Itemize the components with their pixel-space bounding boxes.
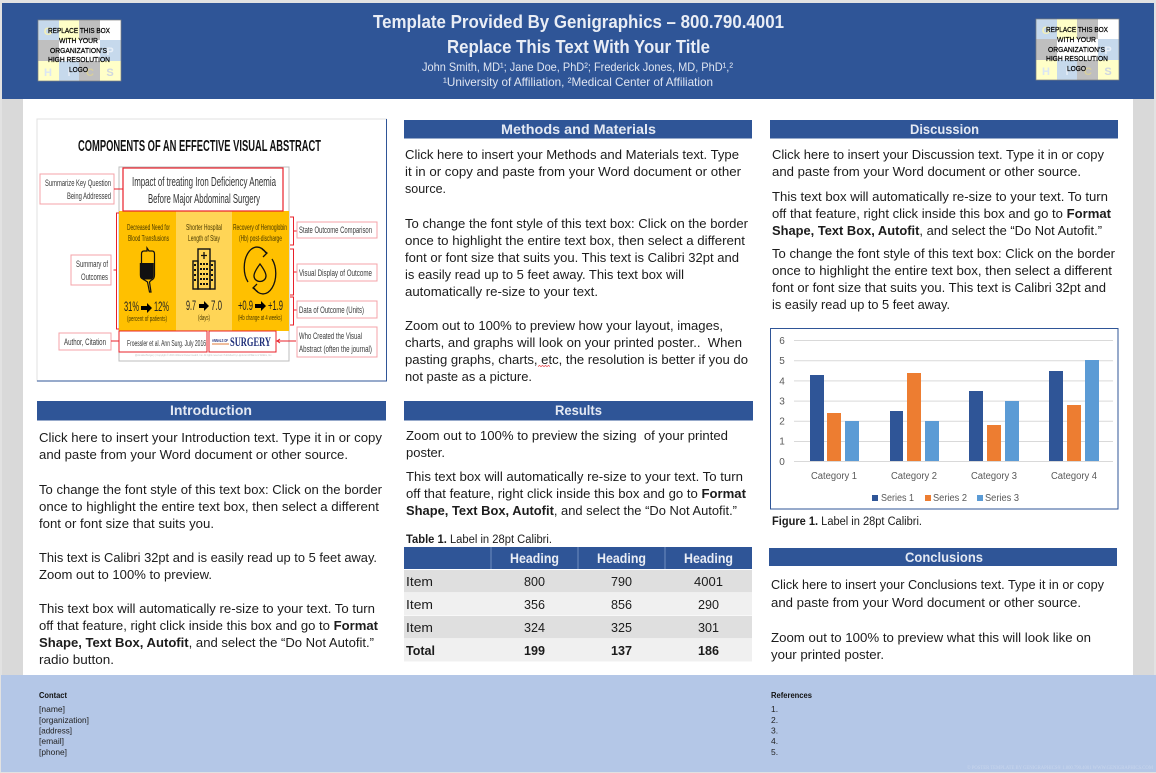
- figure title: COMPONENTS OF AN EFFECTIVE VISUAL ABSTRACT: [78, 138, 321, 155]
- text: methods body: it in or copy and paste from your Word document or other: [405, 164, 742, 179]
- logo placeholder left: H: [44, 67, 52, 79]
- text: conclusions body: Click here to insert your Conclusions text. Type it in or copy: [771, 577, 1104, 592]
- text: introduction body: To change the font style of this text box: Click on the border: [39, 482, 383, 497]
- text: methods body: [405, 147, 749, 384]
- annotation: summary of outcomes: Outcomes: [81, 272, 108, 282]
- text: conclusions body: Zoom out to 100% to preview what this will look like on: [771, 630, 1091, 645]
- text: introduction body: This text is Calibri 32pt and is easily read up to 5 feet away.: [39, 550, 377, 565]
- footer band: [1, 675, 1156, 772]
- text: introduction body: Click here to insert your Introduction text. Type it in or copy: [39, 430, 382, 445]
- annotation: summary of outcomes: [71, 213, 119, 329]
- data table: 199: [524, 643, 545, 658]
- references block: 2.: [771, 715, 778, 725]
- text: introduction body: off that feature, right click inside this box and go to Format: [39, 618, 379, 633]
- authors: John Smith, MD¹; Jane Doe, PhD²; Frederick Jones, MD, PhD¹,²: [422, 60, 733, 74]
- annotation: summarize key question: [40, 174, 123, 204]
- data table: Total: [406, 643, 435, 658]
- panel: methods and materials: [404, 120, 752, 384]
- references block: [771, 691, 813, 757]
- annotation: author citation: [59, 333, 119, 350]
- bar chart: 6: [779, 336, 785, 347]
- heading: conclusions: [769, 548, 1117, 566]
- outcome headings: Length of Stay: [188, 234, 220, 243]
- annotation: summarize key question: Summarize Key Question: [45, 178, 111, 188]
- logo placeholder left: REPLACE THIS BOX: [48, 26, 110, 35]
- logo placeholder right: S: [1104, 66, 1112, 78]
- data table: 324: [524, 620, 545, 635]
- logo placeholder right: LOGO: [1067, 64, 1086, 73]
- outcome data values: +0.9: [238, 298, 253, 313]
- data table: Item: [406, 620, 433, 635]
- poster title: Replace This Text With Your Title: [447, 37, 710, 57]
- text: methods body: not paste as a picture.: [405, 369, 532, 384]
- annotation: summarize key question: Being Addressed: [67, 191, 111, 201]
- text: introduction body: radio button.: [39, 652, 114, 667]
- logo placeholder right: HIGH RESOLUTION: [1046, 54, 1108, 63]
- chart legend: [872, 493, 1019, 504]
- logo placeholder right: C: [1084, 66, 1092, 78]
- journal logo box: [209, 331, 276, 352]
- outcome headings: [127, 223, 287, 243]
- references block: 4.: [771, 736, 778, 746]
- annotation: summary of outcomes: Summary of: [76, 259, 108, 269]
- outcome data values: 31%: [124, 299, 139, 314]
- logo placeholder left: LOGO: [69, 65, 88, 74]
- bar chart: 2: [779, 416, 785, 428]
- logo placeholder right: ORGANIZATION’S: [1048, 45, 1105, 54]
- annotation: visual display of outcome: [290, 249, 377, 295]
- heading: results: Results: [555, 403, 602, 418]
- data table: 290: [698, 597, 719, 612]
- heading: methods and materials: Methods and Materials: [501, 122, 656, 137]
- text: discussion body: once to highlight the entire text box, then select a different: [772, 263, 1112, 278]
- category labels: Category 2: [891, 471, 937, 482]
- data table: 325: [611, 620, 632, 635]
- logo placeholder left: I: [67, 67, 71, 79]
- text: methods body: Zoom out to 100% to preview how your layout, images,: [405, 318, 723, 333]
- logo placeholder right: P: [1104, 45, 1112, 57]
- annotation: data of outcome: Data of Outcome (Units): [299, 305, 364, 315]
- heading: discussion: Discussion: [910, 122, 979, 137]
- bar chart: 0: [779, 457, 785, 468]
- data table: 137: [611, 643, 632, 658]
- text: results body: [406, 428, 747, 518]
- key question box: Before Major Abdominal Surgery: [148, 192, 260, 206]
- logo placeholder right: REPLACE THIS BOX: [1046, 25, 1108, 34]
- text: conclusions body: your printed poster.: [771, 647, 884, 662]
- text: discussion body: [772, 147, 1116, 312]
- contact block: [email]: [39, 736, 64, 746]
- outcome data values: 12%: [154, 299, 169, 314]
- data table: 4001: [694, 574, 723, 589]
- text: introduction body: and paste from your Word document or other source.: [39, 447, 348, 462]
- text: discussion body: and paste from your Word document or other source.: [772, 164, 1081, 179]
- text: introduction body: Zoom out to 100% to preview.: [39, 567, 212, 582]
- icon: recovery cycle with droplet: [244, 247, 276, 294]
- outcome headings: (Hb) post-discharge: [239, 234, 282, 243]
- text: discussion body: font or font size that suits you. This text is Calibri 32pt and: [772, 280, 1106, 295]
- header banner: [2, 3, 1154, 99]
- text: discussion body: is easily read up to 5 feet away.: [772, 297, 950, 312]
- heading: conclusions: Conclusions: [905, 550, 983, 565]
- table caption: Table 1. Label in 28pt Calibri.: [406, 534, 552, 546]
- annotation: who created the abstract: Abstract (often the journal): [299, 344, 372, 354]
- panel: visual abstract figure: @AnnalsofSurgery | Copyright © 2016 Wolters Kluwer Health, Inc. All rights reserved. Published by Lippincott Williams & Wilkins, Inc.: [135, 353, 272, 357]
- text: introduction body: once to highlight the entire text box, then select a different: [39, 499, 379, 514]
- data table: [404, 547, 752, 662]
- category labels: Category 3: [971, 471, 1017, 482]
- heading: methods and materials: [404, 120, 752, 138]
- text: methods body: source.: [405, 181, 446, 196]
- chart legend: Series 1: [881, 493, 914, 504]
- bar chart: 4: [779, 376, 785, 388]
- contact block: [39, 691, 89, 757]
- annotation: state outcome comparison: State Outcome Comparison: [299, 225, 372, 235]
- outcome data values: (days): [198, 315, 210, 322]
- text: results body: Zoom out to 100% to preview the sizing of your printed: [406, 428, 728, 443]
- chart legend: Series 2: [933, 493, 967, 504]
- heading: introduction: [37, 401, 386, 420]
- annotation: data of outcome: [290, 297, 377, 325]
- data table: Item: [406, 597, 433, 612]
- journal logo box: SURGERY: [230, 334, 271, 349]
- citation box: [119, 331, 207, 352]
- outcome headings: Blood Transfusions: [128, 234, 169, 243]
- logo placeholder left: P: [106, 46, 114, 58]
- logo placeholder right: G: [1042, 25, 1050, 37]
- outcome headings: Shorter Hospital: [186, 223, 222, 232]
- outcome headings: Decreased Need for: [127, 223, 170, 232]
- references block: 1.: [771, 704, 778, 714]
- category labels: Category 4: [1051, 471, 1097, 482]
- panel: results: [404, 401, 753, 662]
- data table: Heading: [684, 551, 733, 566]
- text: methods body: To change the font style of this text box: Click on the border: [405, 216, 749, 231]
- panel: conclusions: [769, 548, 1117, 662]
- logo placeholder right: H: [1042, 66, 1050, 78]
- text: discussion body: off that feature, right click inside this box and go to Format: [772, 206, 1112, 221]
- logo placeholder left: WITH YOUR: [59, 36, 98, 45]
- logo placeholder left: ORGANIZATION’S: [50, 46, 107, 55]
- text: results body: Shape, Text Box, Autofit, and select the “Do Not Autofit.”: [406, 503, 737, 518]
- data table: 186: [698, 643, 719, 658]
- text: methods body: pasting graphs, charts, etc, the resolution is better if you do: [405, 352, 748, 367]
- references block: References: [771, 691, 813, 700]
- outcome data values: (percent of patients): [127, 316, 167, 323]
- poster title: Template Provided By Genigraphics – 800.790.4001: [373, 12, 784, 32]
- text: methods body: once to highlight the entire text box, then select a different: [405, 233, 745, 248]
- outcome data values: (Hb change at 4 weeks): [238, 315, 282, 322]
- text: discussion body: To change the font style of this text box: Click on the border: [772, 246, 1116, 261]
- heading: results: [404, 401, 753, 420]
- text: introduction body: Shape, Text Box, Autofit, and select the “Do Not Autofit.”: [39, 635, 374, 650]
- affiliations: ¹University of Affiliation, ²Medical Center of Affiliation: [443, 75, 713, 89]
- logo placeholder right: WITH YOUR: [1057, 35, 1096, 44]
- data table: Item: [406, 574, 433, 589]
- outcome data values: +1.9: [268, 298, 283, 313]
- series 2 bars: [827, 373, 1081, 461]
- contact block: [phone]: [39, 747, 67, 757]
- text: conclusions body: and paste from your Word document or other source.: [771, 595, 1081, 610]
- bar chart: 1: [779, 436, 785, 448]
- logo placeholder left: S: [106, 67, 114, 79]
- bar chart: [770, 328, 1118, 509]
- data table: 301: [698, 620, 719, 635]
- text: introduction body: This text box will automatically re-size to your text. To turn: [39, 601, 375, 616]
- annotation: who created the abstract: Who Created the Visual: [299, 331, 362, 341]
- icon: hospital: [193, 249, 215, 289]
- citation box: Froessler et al. Ann Surg. July 2016: [127, 338, 206, 348]
- figure caption: Figure 1. Label in 28pt Calibri.: [772, 516, 922, 528]
- references block: 5.: [771, 747, 778, 757]
- text: introduction body: [39, 430, 383, 667]
- contact block: [organization]: [39, 715, 89, 725]
- logo placeholder left: G: [44, 26, 52, 38]
- text: results body: poster.: [406, 445, 445, 460]
- heading: discussion: [770, 120, 1118, 138]
- annotation: who created the abstract: [277, 327, 377, 357]
- logo placeholder right: I: [1065, 66, 1069, 78]
- bar chart: 5: [779, 356, 785, 367]
- contact block: Contact: [39, 691, 67, 700]
- journal logo box: ANNALS OF: [212, 338, 228, 343]
- poster title: [373, 12, 784, 57]
- text: methods body: font or font size that suits you. This text is Calibri 32pt and: [405, 250, 739, 265]
- annotation: author citation: Author, Citation: [64, 337, 106, 347]
- outcome data values: 9.7: [186, 298, 196, 313]
- logo placeholder left: [38, 20, 121, 81]
- chart legend: Series 3: [985, 493, 1019, 504]
- text: conclusions body: [771, 577, 1104, 662]
- series 3 bars: [845, 360, 1099, 461]
- text: methods body: is easily read up to 5 feet away. This text box will: [405, 267, 684, 282]
- references block: 3.: [771, 726, 778, 736]
- series 1 bars: [810, 371, 1063, 461]
- annotation: state outcome comparison: [290, 217, 377, 245]
- logo placeholder left: HIGH RESOLUTION: [48, 55, 110, 64]
- outcome data values: 7.0: [211, 298, 222, 313]
- data table: 856: [611, 597, 632, 612]
- icon: blood bag: [140, 248, 154, 292]
- text: methods body: Click here to insert your Methods and Materials text. Type: [405, 147, 739, 162]
- contact block: [name]: [39, 704, 65, 714]
- logo placeholder right: [1036, 19, 1119, 80]
- text: introduction body: font or font size that suits you.: [39, 516, 214, 531]
- text: discussion body: This text box will automatically re-size to your text. To turn: [772, 189, 1108, 204]
- key question box: [123, 168, 283, 211]
- text: methods body: automatically re-size to your text.: [405, 284, 598, 299]
- text: methods body: charts, and graphs will look on your printed poster.. When: [405, 335, 742, 350]
- key question box: Impact of treating Iron Deficiency Anemia: [132, 175, 276, 189]
- panel: introduction: [37, 401, 386, 667]
- text: results body: off that feature, right click inside this box and go to Format: [406, 486, 747, 501]
- annotation: visual display of outcome: Visual Display of Outcome: [299, 268, 372, 278]
- category labels: Category 1: [811, 471, 857, 482]
- data table: Heading: [597, 551, 646, 566]
- panel: visual abstract figure: [37, 119, 386, 381]
- text: discussion body: Shape, Text Box, Autofit, and select the “Do Not Autofit.”: [772, 223, 1102, 238]
- data table: Heading: [510, 551, 559, 566]
- category labels: [811, 471, 1097, 482]
- data table: 790: [611, 574, 632, 589]
- bar chart: 3: [779, 396, 785, 408]
- outcome data values: [124, 298, 283, 323]
- heading: introduction: Introduction: [170, 403, 252, 418]
- outcome headings: Recovery of Hemoglobin: [233, 223, 287, 232]
- text: discussion body: Click here to insert your Discussion text. Type it in or copy: [772, 147, 1104, 162]
- contact block: [address]: [39, 726, 72, 736]
- text: results body: This text box will automatically re-size to your text. To turn: [406, 469, 743, 484]
- data table: 356: [524, 597, 545, 612]
- panel: discussion: [770, 120, 1118, 528]
- logo placeholder left: C: [86, 67, 94, 79]
- data table: 800: [524, 574, 545, 589]
